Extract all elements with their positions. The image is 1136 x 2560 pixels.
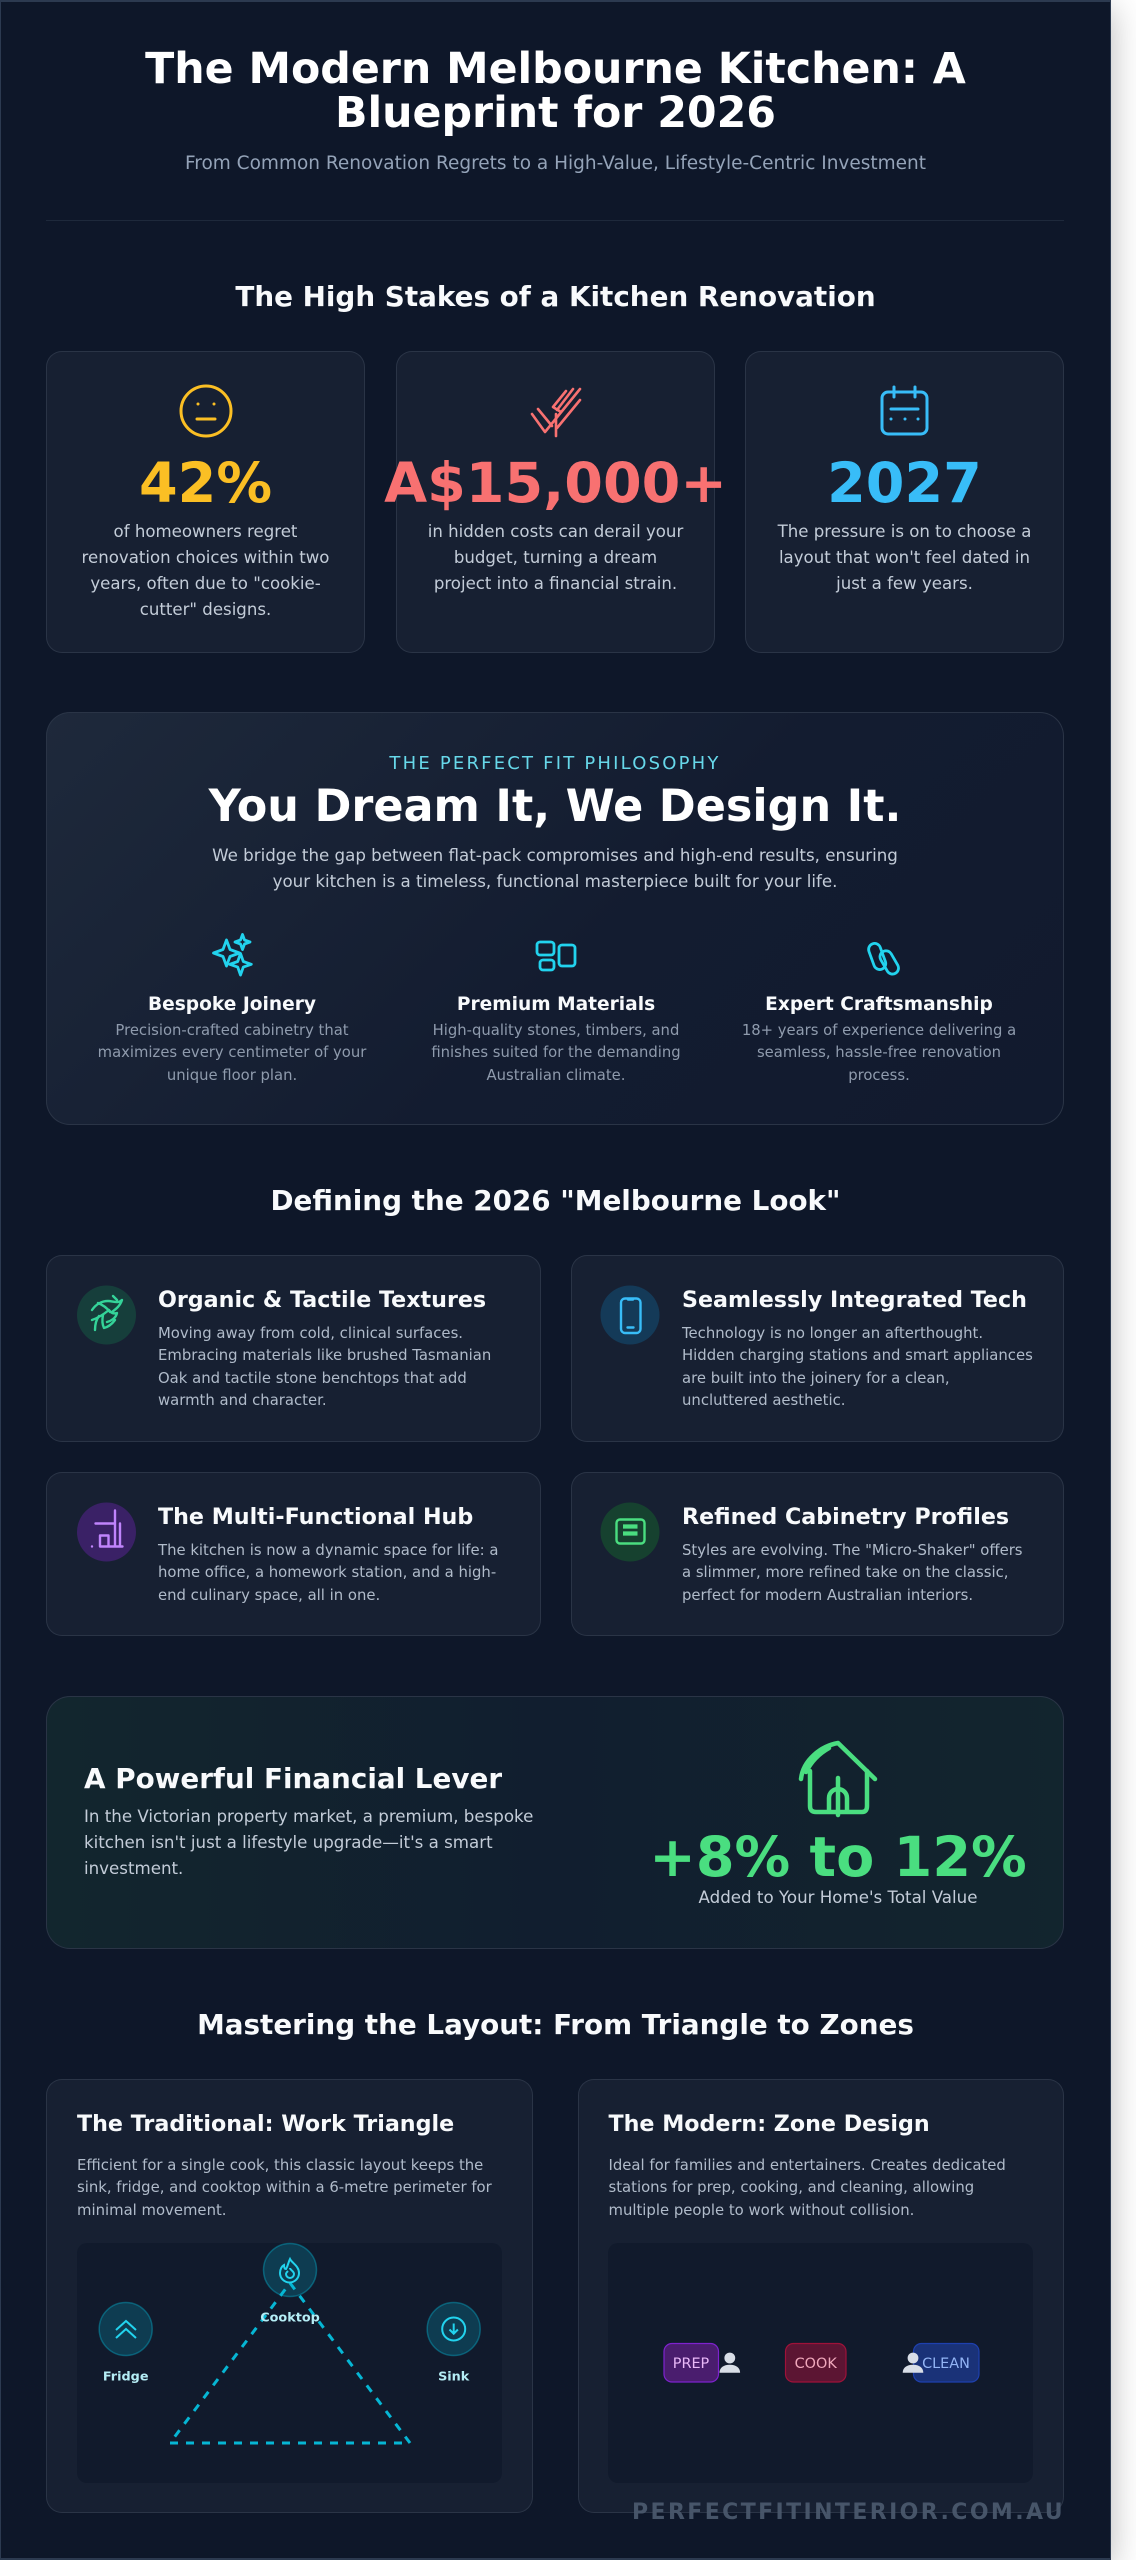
card text <box>682 1324 1033 1409</box>
node: cooktop: Cooktop <box>260 2310 320 2326</box>
card text <box>158 1324 491 1409</box>
hero paragraph: We bridge the gap between flat-pack compromises and high-end results, ensuring <box>212 846 898 865</box>
panel: stat 2027 <box>745 351 1064 653</box>
watermark: PERFECTFITINTERIOR.COM.AU <box>632 2500 1065 2525</box>
zone label: clean: CLEAN <box>922 2356 970 2372</box>
stat description <box>778 522 1031 593</box>
node: cooktop <box>260 2244 320 2326</box>
column text: process. <box>848 1067 910 1084</box>
column text: 18+ years of experience delivering a <box>742 1022 1016 1039</box>
card text: stations for prep, cooking, and cleaning, allowing <box>608 2178 974 2196</box>
subtitle: From Common Renovation Regrets to a High-Value, Lifestyle-Centric Investment <box>185 153 926 174</box>
icon: house <box>798 1740 878 1818</box>
card text: Styles are evolving. The "Micro-Shaker" offers <box>682 1541 1023 1559</box>
panel: organic textures <box>46 1255 541 1442</box>
stat description: of homeowners regret <box>114 522 297 541</box>
stat description: The pressure is on to choose a <box>778 522 1031 541</box>
icon: person <box>903 2353 923 2373</box>
icon: person <box>720 2353 740 2373</box>
stat number: 2027 <box>827 451 982 516</box>
stat description <box>428 522 684 593</box>
hero paragraph <box>212 846 898 891</box>
card title: Refined Cabinetry Profiles <box>682 1504 1009 1530</box>
stat description: cutter" designs. <box>140 600 271 619</box>
card text: Technology is no longer an afterthought. <box>682 1324 983 1342</box>
hero paragraph: your kitchen is a timeless, functional masterpiece built for your life. <box>273 872 837 891</box>
column heading: Expert Craftsmanship <box>765 994 993 1015</box>
icon: cabinet <box>600 1502 660 1562</box>
node: sink <box>427 2302 480 2384</box>
icon: layout blocks <box>536 940 576 972</box>
column text: seamless, hassle-free renovation <box>757 1044 1001 1061</box>
card text: perfect for modern Australian interiors. <box>682 1586 973 1604</box>
stat number: 42% <box>139 451 272 516</box>
column text: High-quality stones, timbers, and <box>433 1022 679 1039</box>
title: Blueprint for 2026 <box>335 88 776 138</box>
zone: prep <box>664 2344 718 2382</box>
stat description: layout that won't feel dated in <box>779 548 1030 567</box>
column text: maximizes every centimeter of your <box>98 1044 366 1061</box>
card text: Moving away from cold, clinical surfaces. <box>158 1324 463 1342</box>
zone: cook <box>786 2344 846 2382</box>
icon: sparkles <box>212 933 253 976</box>
card text: sink, fridge, and cooktop within a 6-metre perimeter for <box>77 2178 492 2196</box>
card text: Embracing materials like brushed Tasmanian <box>158 1346 491 1364</box>
dashed work triangle <box>170 2283 410 2443</box>
column text <box>431 1022 681 1084</box>
card text: Oak and tactile stone benchtops that add <box>158 1369 467 1387</box>
panel: stat 42% <box>46 351 365 653</box>
value caption: Added to Your Home's Total Value <box>699 1888 977 1907</box>
heading: melbourne look: Defining the 2026 "Melbourne Look" <box>270 1184 841 1217</box>
panel: multi-functional hub <box>46 1472 541 1636</box>
card text: uncluttered aesthetic. <box>682 1391 845 1409</box>
column text: finishes suited for the demanding <box>431 1044 681 1061</box>
zone diagram <box>608 2243 1033 2483</box>
stat description: years, often due to "cookie- <box>90 574 321 593</box>
column heading: Premium Materials <box>457 994 655 1015</box>
card text <box>608 2156 1006 2219</box>
panel: work triangle <box>46 2079 533 2513</box>
zone: prep: PREP <box>673 2356 710 2372</box>
column text <box>98 1022 366 1084</box>
card text: home office, a homework station, and a high- <box>158 1563 496 1581</box>
panel text: investment. <box>84 1859 183 1878</box>
column text: Australian climate. <box>486 1067 625 1084</box>
column: expert craftsmanship <box>742 942 1016 1084</box>
card title: The Multi-Functional Hub <box>158 1504 473 1530</box>
card text: Hidden charging stations and smart appliances <box>682 1346 1033 1364</box>
title <box>145 44 966 138</box>
column: premium materials <box>431 940 681 1084</box>
panel: stat A$15,000+ <box>396 351 715 653</box>
panel: perfect fit philosophy <box>46 712 1064 1125</box>
card text <box>682 1541 1023 1604</box>
card title: The Traditional: Work Triangle <box>77 2111 454 2137</box>
panel: zone design <box>578 2079 1064 2513</box>
panel: financial lever <box>46 1696 1064 1949</box>
column: bespoke joinery <box>98 933 366 1084</box>
card text: Efficient for a single cook, this classic layout keeps the <box>77 2156 483 2174</box>
zone: cook: COOK <box>795 2356 837 2372</box>
card title: The Modern: Zone Design <box>608 2111 930 2137</box>
card text: multiple people to work without collision. <box>608 2201 914 2219</box>
column text: unique floor plan. <box>167 1067 297 1084</box>
heading: mastering the layout: Mastering the Layout: From Triangle to Zones <box>197 2008 914 2041</box>
panel text: kitchen isn't just a lifestyle upgrade—it's a smart <box>84 1833 493 1852</box>
card text <box>77 2156 492 2219</box>
icon: leaf <box>77 1286 136 1344</box>
column text: Precision-crafted cabinetry that <box>115 1022 349 1039</box>
card text: a slimmer, more refined take on the classic, <box>682 1563 1008 1581</box>
card text: end culinary space, all in one. <box>158 1586 380 1604</box>
stat description: budget, turning a dream <box>454 548 657 567</box>
value figure: +8% to 12% <box>649 1825 1027 1890</box>
node: fridge: Fridge <box>103 2370 149 2384</box>
panel text: In the Victorian property market, a premium, bespoke <box>84 1807 533 1826</box>
triangle diagram <box>77 2243 502 2483</box>
hero heading: You Dream It, We Design It. <box>209 781 901 832</box>
panel: integrated tech <box>571 1255 1064 1442</box>
zone: clean <box>914 2344 979 2382</box>
heading: high stakes: The High Stakes of a Kitchen Renovation <box>235 280 876 313</box>
icon: calendar <box>880 386 928 436</box>
card text: minimal movement. <box>77 2201 227 2219</box>
card title: Organic & Tactile Textures <box>158 1287 486 1313</box>
stat description: renovation choices within two <box>82 548 329 567</box>
node: fridge <box>99 2302 152 2384</box>
icon: phone <box>600 1286 660 1344</box>
panel text <box>84 1807 533 1878</box>
stat description: in hidden costs can derail your <box>428 522 683 541</box>
panel title: A Powerful Financial Lever <box>84 1762 502 1795</box>
icon: linked capsules <box>867 942 900 976</box>
node: sink: Sink <box>438 2370 470 2384</box>
icon: slashed coins <box>530 388 582 438</box>
stat description <box>82 522 329 619</box>
column heading: Bespoke Joinery <box>148 994 316 1015</box>
card text: Ideal for families and entertainers. Creates dedicated <box>608 2156 1006 2174</box>
card text: are built into the joinery for a clean, <box>682 1369 950 1387</box>
card text <box>158 1541 498 1604</box>
card title: Seamlessly Integrated Tech <box>682 1287 1027 1313</box>
icon: chart bars <box>77 1502 136 1562</box>
panel: refined cabinetry <box>571 1472 1064 1636</box>
eyebrow: THE PERFECT FIT PHILOSOPHY <box>389 753 721 774</box>
title: The Modern Melbourne Kitchen: A <box>145 44 966 94</box>
stat number: A$15,000+ <box>384 451 727 516</box>
card text: The kitchen is now a dynamic space for life: a <box>158 1541 498 1559</box>
icon: neutral face <box>180 384 232 438</box>
stat description: project into a financial strain. <box>434 574 677 593</box>
card text: warmth and character. <box>158 1391 327 1409</box>
stat description: just a few years. <box>836 574 973 593</box>
column text <box>742 1022 1016 1084</box>
